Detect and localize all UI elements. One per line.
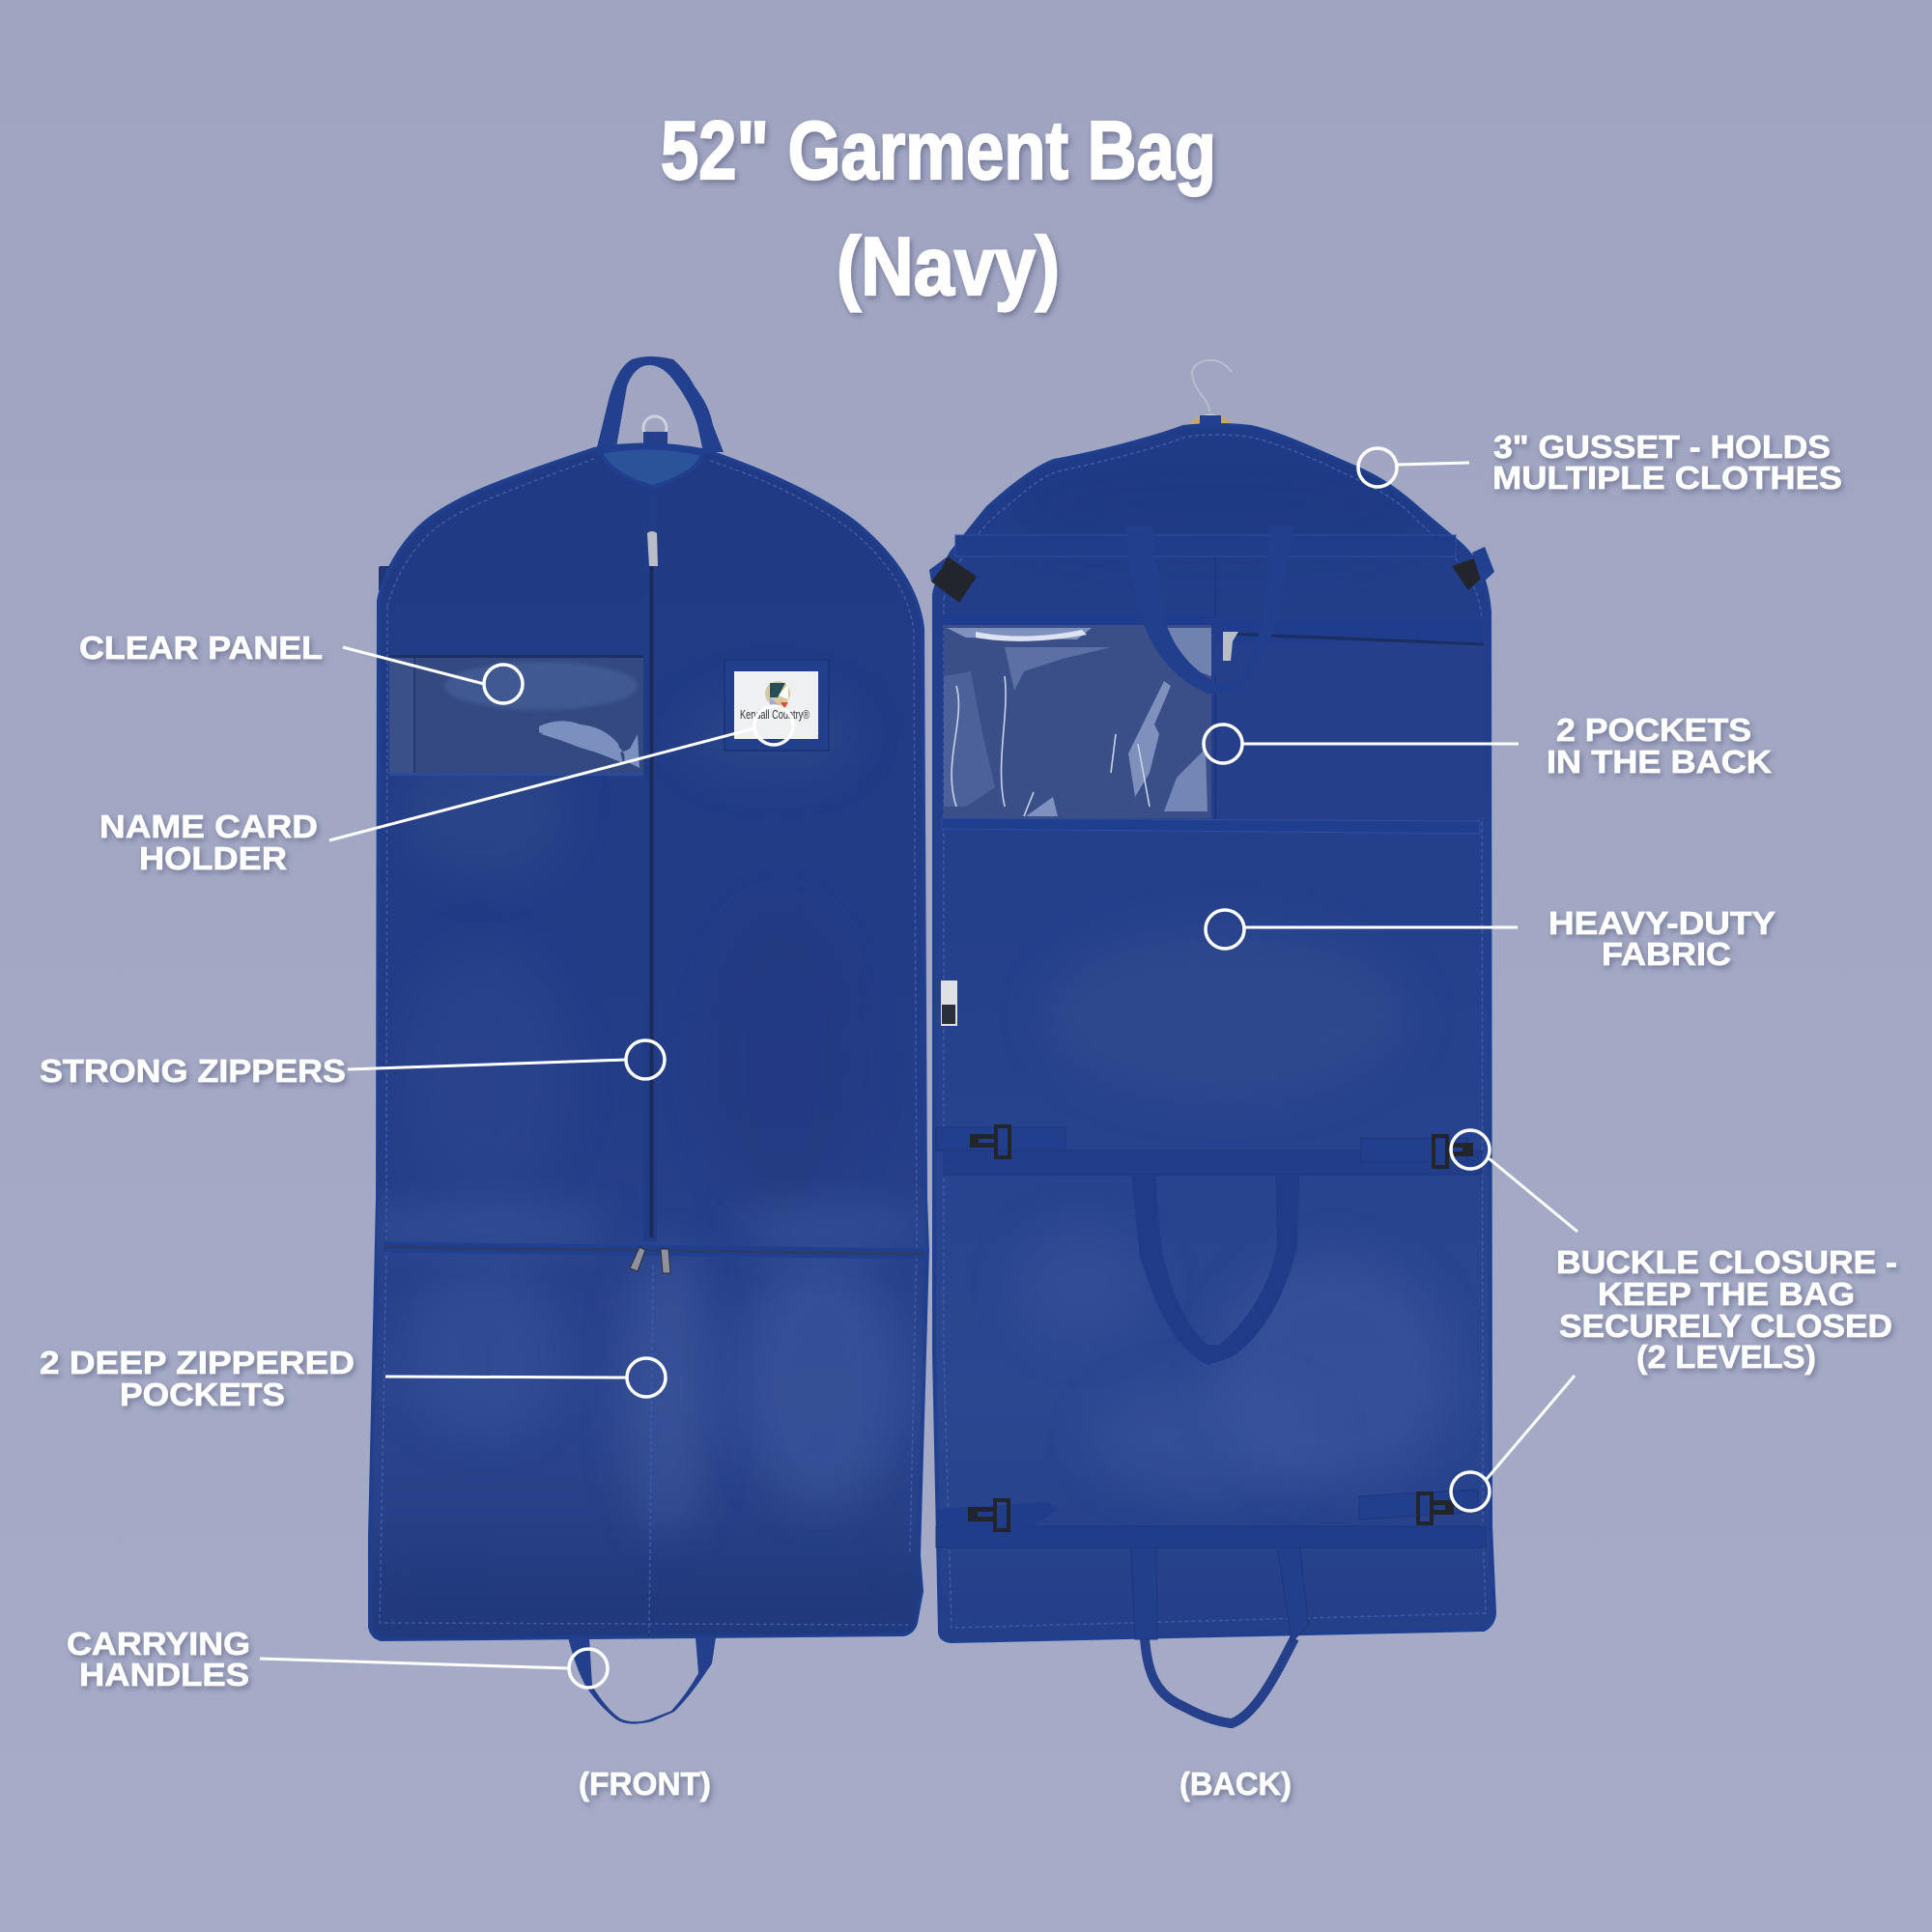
- label: buckle closure: SECURELY CLOSED: [1559, 1308, 1892, 1344]
- front fabric highlights: [357, 691, 927, 1642]
- logo text: Kendall Country®: [740, 708, 810, 722]
- back garment bag: [929, 360, 1494, 1723]
- label: clear panel: CLEAR PANEL: [79, 630, 323, 666]
- label: back pockets: IN THE BACK: [1547, 744, 1772, 780]
- label: buckle closure: BUCKLE CLOSURE -: [1556, 1244, 1897, 1280]
- callout: clear panel: [343, 647, 523, 703]
- label: deep zippered pockets: [40, 1345, 355, 1412]
- front clear panel: [389, 655, 643, 776]
- callout: strong zippers: [348, 1040, 665, 1079]
- callout: name card holder: [329, 706, 793, 840]
- bottom handle straps: [1131, 1548, 1309, 1642]
- label: gusset: 3" GUSSET - HOLDS: [1493, 429, 1831, 465]
- label: gusset: MULTIPLE CLOTHES: [1492, 460, 1842, 496]
- upper cross strap: [955, 535, 1456, 556]
- label: name card holder: [99, 809, 318, 876]
- label: heavy-duty fabric: HEAVY-DUTY: [1548, 905, 1776, 941]
- buckle upper right: [1434, 1136, 1473, 1167]
- label: back pockets: 2 POCKETS: [1556, 712, 1751, 748]
- back fabric highlights: [1005, 454, 1449, 1497]
- label: carrying handles: CARRYING: [67, 1626, 250, 1662]
- front bag body: [370, 444, 927, 1639]
- buckle upper left: [970, 1126, 1009, 1157]
- back bottom handle loop: [1145, 1638, 1294, 1723]
- label: deep zippered pockets: 2 DEEP ZIPPERED: [40, 1345, 355, 1380]
- top buckle right: [1452, 547, 1494, 590]
- hanger ring: [643, 416, 668, 453]
- callout: upper buckle: [1451, 1130, 1577, 1232]
- buckle lower left: [968, 1500, 1009, 1530]
- callout: back pockets: [1204, 724, 1519, 763]
- front bottom carrying handle: [568, 1637, 716, 1724]
- label: heavy-duty fabric: [1548, 905, 1776, 972]
- back upper carrying handle: [1126, 526, 1294, 694]
- label: buckle closure: KEEP THE BAG: [1598, 1276, 1855, 1312]
- title: (Navy): [837, 221, 1060, 313]
- label: buckle closure: [1556, 1244, 1897, 1375]
- logo mark: [765, 681, 790, 709]
- callout: lower buckle: [1451, 1376, 1575, 1511]
- title: 52" Garment Bag: [661, 105, 1216, 197]
- back pocket bottom band: [942, 818, 1480, 834]
- label: back pockets: [1547, 712, 1772, 780]
- top buckle left: [929, 556, 977, 603]
- back zipper puller: [1223, 632, 1238, 661]
- label: gusset: [1492, 429, 1842, 496]
- front centre zipper: [643, 488, 658, 1241]
- label: strong zippers: STRONG ZIPPERS: [40, 1053, 346, 1089]
- label: front: (FRONT): [579, 1766, 711, 1802]
- front neck lining: [601, 447, 702, 487]
- label: back: (BACK): [1179, 1766, 1292, 1802]
- back lower section strap one: [936, 1127, 1482, 1175]
- side tab: [379, 566, 392, 591]
- label: name card holder: HOLDER: [139, 840, 287, 876]
- callout: gusset: [1358, 448, 1469, 487]
- label: heavy-duty fabric: FABRIC: [1602, 936, 1731, 972]
- callout: heavy-duty fabric: [1206, 910, 1518, 949]
- label: name card holder: NAME CARD: [99, 809, 318, 844]
- front top handle: [596, 356, 724, 452]
- front stitching: [380, 459, 917, 1633]
- label: carrying handles: HANDLES: [79, 1657, 249, 1692]
- back tag: [941, 980, 957, 1026]
- callout: deep pockets: [385, 1358, 666, 1397]
- name card holder: [724, 660, 829, 751]
- buckle lower right: [1418, 1493, 1454, 1523]
- title: [661, 105, 1216, 313]
- lower pocket zipper: [384, 1247, 925, 1273]
- back clear panel: [944, 625, 1211, 818]
- back stitching: [944, 435, 1486, 1628]
- middle carrying handle: [1131, 1175, 1299, 1365]
- front garment bag: [357, 356, 927, 1724]
- label: deep zippered pockets: POCKETS: [120, 1377, 285, 1412]
- label: carrying handles: [67, 1626, 250, 1692]
- back lower strap two: [936, 1490, 1486, 1548]
- hanger: [1184, 360, 1236, 429]
- back upper pocket: [943, 556, 1486, 821]
- callout: carrying handles: [260, 1649, 608, 1688]
- label: buckle closure: (2 LEVELS): [1636, 1339, 1816, 1375]
- back bag body: [934, 425, 1494, 1641]
